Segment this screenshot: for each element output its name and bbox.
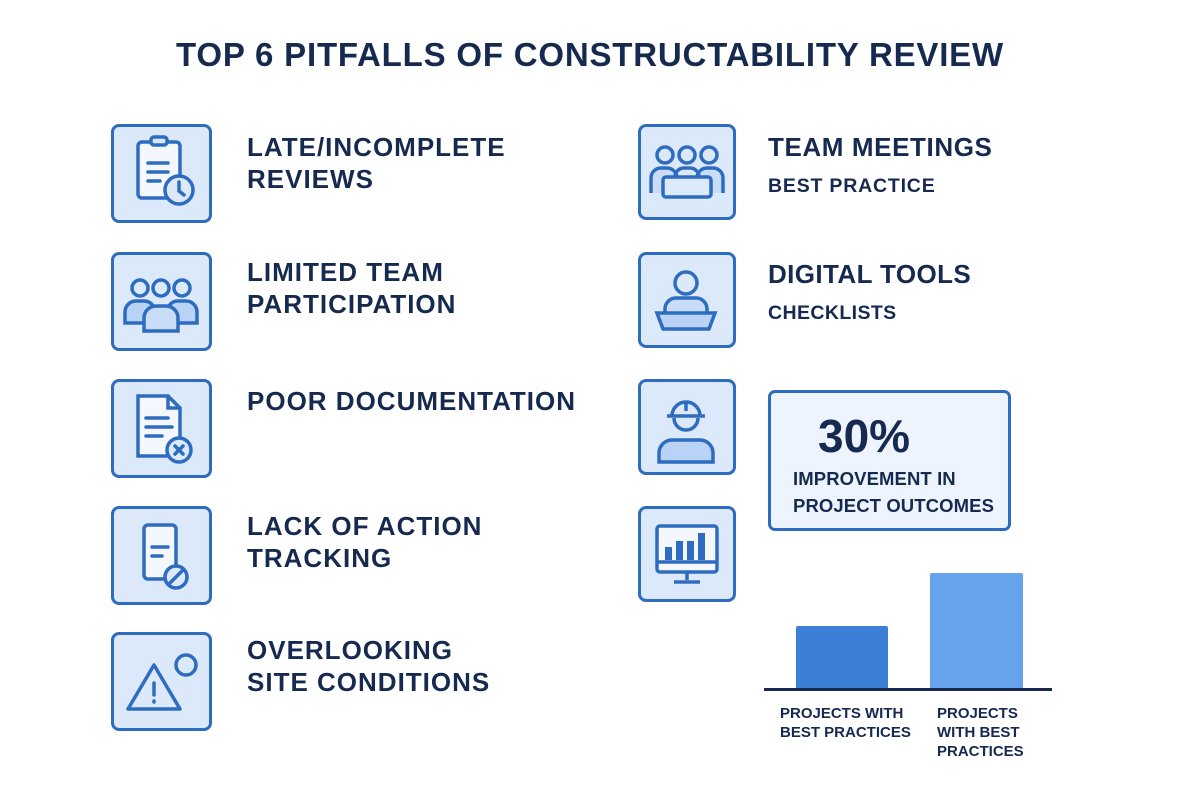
icon: clipboard clock [111,124,212,223]
callout: 30%: IMPROVEMENT IN [793,468,956,489]
text: digital tools: DIGITAL TOOLS [768,259,971,289]
label: bar 2 [937,705,1024,760]
text: limited team: PARTICIPATION [247,289,456,319]
label: bar 2: PRACTICES [937,743,1024,760]
text: best practice: BEST PRACTICE [768,175,936,197]
title: TOP 6 PITFALLS OF CONSTRUCTABILITY REVIEW [176,36,1004,73]
callout: 30% [768,390,1011,531]
bar chart [764,573,1052,691]
label: bar 1 [780,705,911,741]
icon: monitor chart [638,506,736,602]
text: lack of action tracking: TRACKING [247,543,392,573]
text: overlooking site conditions: OVERLOOKING [247,635,453,665]
text: late/incomplete: REVIEWS [247,164,374,194]
text: late/incomplete [247,132,506,194]
text: team meetings: TEAM MEETINGS [768,132,992,162]
text: lack of action tracking [247,511,482,573]
text: limited team [247,257,456,319]
icon: team [111,252,212,351]
icon: person at desk [638,252,736,348]
text: overlooking site conditions [247,635,490,697]
label: bar 2: WITH BEST [937,724,1020,741]
text: lack of action tracking: LACK OF ACTION [247,511,482,541]
icon: warning [111,632,212,731]
text: poor documentation: POOR DOCUMENTATION [247,386,576,416]
label: bar 1: PROJECTS WITH [780,705,903,722]
callout: 30%: PROJECT OUTCOMES [793,495,994,516]
text: limited team: LIMITED TEAM [247,257,444,287]
text: overlooking site conditions: SITE CONDITIONS [247,667,490,697]
icon: worker [638,379,736,475]
label: bar 2: PROJECTS [937,705,1018,722]
text: late/incomplete: LATE/INCOMPLETE [247,132,506,162]
text: checklists: CHECKLISTS [768,302,897,324]
label: bar 1: BEST PRACTICES [780,724,911,741]
callout: 30%: 30% [818,410,910,462]
icon: document x [111,379,212,478]
icon: document slash [111,506,212,605]
icon: meeting [638,124,736,220]
